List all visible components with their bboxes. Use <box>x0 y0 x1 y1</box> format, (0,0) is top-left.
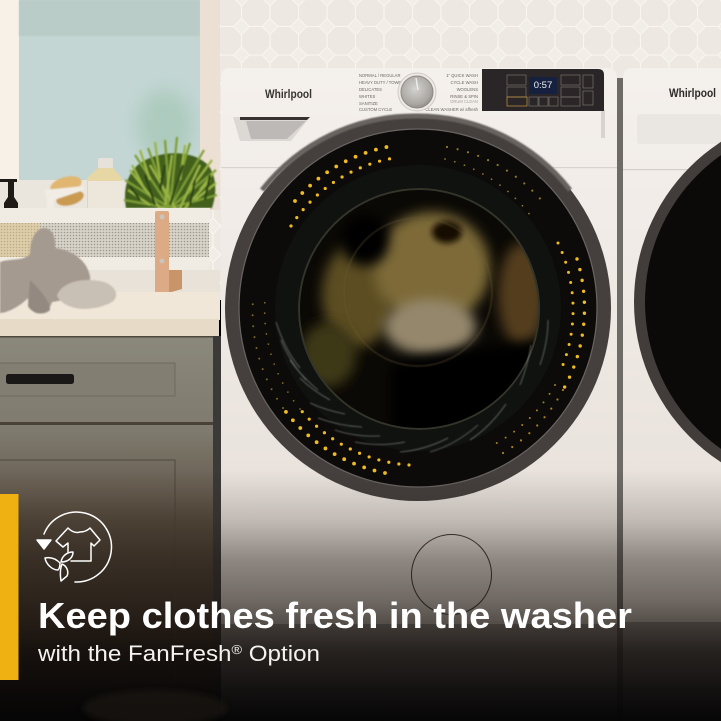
subtitle: ® <box>232 642 242 657</box>
panel buttons <box>507 75 593 106</box>
dots: top right faint <box>445 147 543 215</box>
leather strap <box>155 211 182 293</box>
tiled wall <box>0 0 721 300</box>
cycle labels right: WOOLENS <box>457 87 478 92</box>
cabinet <box>0 336 221 721</box>
cycle labels right <box>425 73 479 112</box>
main washer body <box>221 68 617 721</box>
detergent drawer <box>233 117 310 141</box>
door ring <box>225 115 611 501</box>
wire basket <box>0 208 210 270</box>
round lower door release <box>412 534 492 614</box>
washer kick plate <box>221 622 721 721</box>
cycle labels right: DRUM CLEAN <box>450 99 478 104</box>
gap between washers <box>617 78 623 721</box>
dark gradient overlay <box>0 470 721 721</box>
inner glass with clothes <box>298 188 546 440</box>
cycle labels right: CYCLE WASH <box>450 80 478 85</box>
potted plant <box>124 137 217 208</box>
cycle labels left: HEAVY DUTY / TOWELS <box>359 80 407 85</box>
right washer <box>623 68 721 721</box>
dots: top left bright <box>291 146 394 226</box>
dots: right bright <box>558 243 584 390</box>
panel display: 0:57 <box>534 80 552 91</box>
window <box>0 0 220 210</box>
wooden brush <box>44 173 85 209</box>
subtitle: Option <box>242 641 320 666</box>
control panel <box>482 69 604 111</box>
cycle labels right: 1" QUICK WASH <box>446 73 478 78</box>
bottle <box>87 158 122 209</box>
dots: left fading <box>253 300 300 409</box>
dots: bottom left bright <box>283 408 409 473</box>
right washer door <box>634 111 721 493</box>
cycle labels right: CLEAN WASHER w/ affresh <box>425 107 479 112</box>
cycle labels right: RINSE & SPIN <box>450 94 478 99</box>
soap pump <box>0 179 18 209</box>
cycle labels left: SANITIZE <box>359 101 378 106</box>
cycle labels left: WHITES <box>359 94 375 99</box>
title: Keep clothes fresh in the washer <box>38 595 632 636</box>
cycle labels left <box>359 73 407 112</box>
cycle labels left: NORMAL / REGULAR <box>359 73 400 78</box>
cycle labels left: CUSTOM CYCLE <box>359 107 392 112</box>
washer door <box>225 115 611 501</box>
dots: lower right fading <box>495 385 563 453</box>
cycle knob <box>398 73 436 111</box>
swirl highlights <box>276 320 548 452</box>
yellow accent bar <box>0 494 18 680</box>
plush elephant <box>0 228 116 313</box>
laundry pile silhouette <box>83 690 227 721</box>
subtitle: with the FanFresh <box>38 641 214 666</box>
cabinet handle <box>6 374 74 384</box>
icon: shirt with fan in refresh arrow <box>37 512 111 582</box>
washer logo: Whirlpool <box>265 87 312 101</box>
right washer logo: Whirlpool <box>669 88 716 100</box>
counter top <box>0 292 220 336</box>
wall below basket <box>0 270 220 292</box>
cycle labels left: DELICATES <box>359 87 382 92</box>
